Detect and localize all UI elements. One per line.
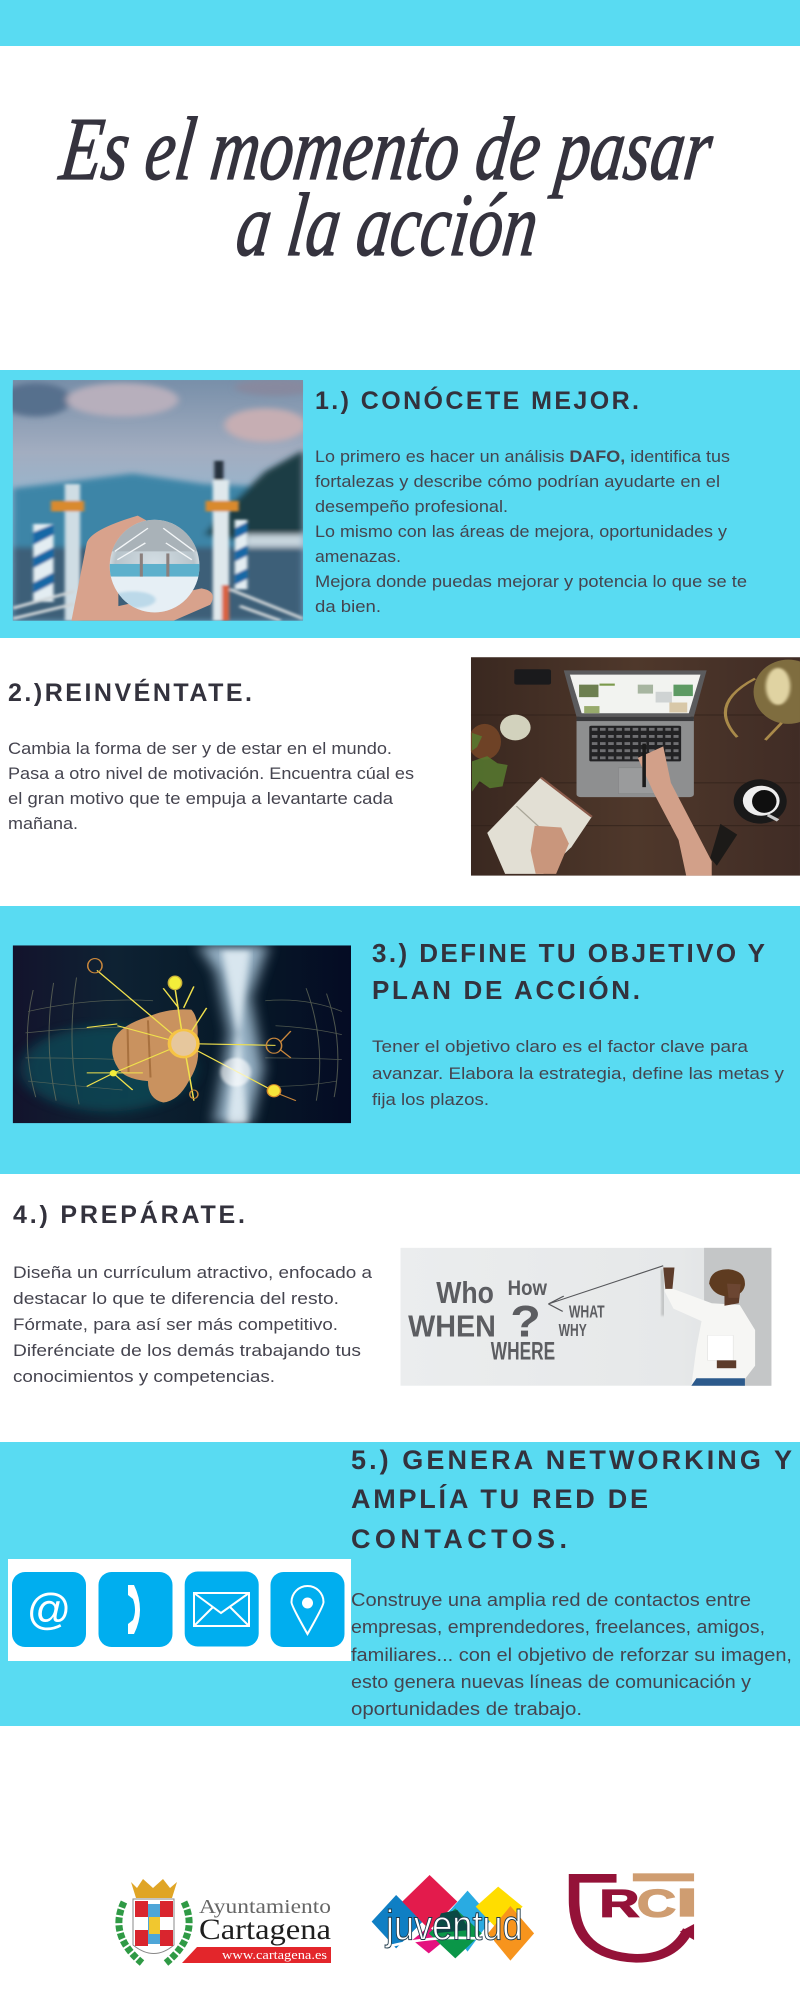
body text xyxy=(13,1263,373,1386)
logo: juventud: juventud xyxy=(384,1902,523,1948)
logo: RCT xyxy=(574,1873,694,1958)
arm with pen xyxy=(638,746,712,876)
heading: 5.) GENERA NETWORKING Y xyxy=(351,1445,792,1475)
body text: Lo mismo con las áreas de mejora, oportunidades y xyxy=(315,522,728,541)
body text: desempeño profesional. xyxy=(315,497,508,516)
panel: 1 conócete mejor xyxy=(0,370,800,638)
heading: AMPLÍA TU RED DE xyxy=(351,1483,648,1514)
plant xyxy=(468,724,501,760)
body text: conocimientos y competencias. xyxy=(13,1367,275,1386)
photo: woman writing questions on whiteboard: How xyxy=(508,1276,547,1300)
body text: amenazas. xyxy=(315,547,401,566)
body text: fija los plazos. xyxy=(372,1090,489,1109)
logo: Ayuntamiento de Cartagena xyxy=(119,1879,331,1963)
body text: fortalezas y describe cómo podrían ayudarte en el xyxy=(315,472,720,491)
body text xyxy=(372,1037,785,1109)
title xyxy=(54,99,718,275)
photo: woman writing questions on whiteboard: ? xyxy=(510,1296,541,1346)
crest xyxy=(119,1879,189,1963)
heading: PLAN DE ACCIÓN. xyxy=(372,975,640,1005)
body text: mañana. xyxy=(8,814,78,833)
icon: at sign xyxy=(12,1572,86,1647)
photo: finger pointing at network graphic xyxy=(13,945,351,1123)
body text: empresas, emprendedores, freelances, amigos, xyxy=(351,1616,765,1637)
lamp xyxy=(754,660,800,724)
body text xyxy=(8,739,414,833)
photo: woman writing questions on whiteboard: WHY xyxy=(559,1320,587,1340)
body text: Diseña un currículum atractivo, enfocado a xyxy=(13,1263,373,1282)
body text: familiares... con el objetivo de reforzar su imagen, xyxy=(351,1644,792,1665)
crystal ball xyxy=(110,520,199,612)
heading: 1.) CONÓCETE MEJOR. xyxy=(315,385,639,415)
hand xyxy=(71,516,213,621)
heading: 4.) PREPÁRATE. xyxy=(13,1200,245,1229)
body text xyxy=(315,447,747,616)
photo: woman writing questions on whiteboard: Who xyxy=(436,1276,494,1310)
body text: el gran motivo que te empuja a levantarte cada xyxy=(8,789,394,808)
body text: Lo primero es hacer un análisis DAFO, identifica tus xyxy=(315,447,730,466)
notebook xyxy=(487,777,592,874)
logo: Ayuntamiento de Cartagena: www.cartagena.es xyxy=(222,1947,327,1962)
body text: Tener el objetivo claro es el factor clave para xyxy=(372,1037,749,1056)
panel: 4 prepárate xyxy=(13,1200,771,1386)
body text: Fórmate, para así ser más competitivo. xyxy=(13,1315,338,1334)
contact icons strip xyxy=(8,1559,351,1661)
top band xyxy=(0,0,800,46)
icon: envelope xyxy=(185,1572,259,1646)
fist xyxy=(112,1009,198,1102)
panel: 3 define tu objetivo xyxy=(0,906,800,1174)
photo: hand holding crystal ball xyxy=(0,379,316,621)
body text: destacar lo que te diferencia del resto. xyxy=(13,1289,339,1308)
body text: Cambia la forma de ser y de estar en el mundo. xyxy=(8,739,392,758)
photo: woman writing questions on whiteboard: WHERE xyxy=(491,1337,555,1365)
laptop screen xyxy=(564,670,707,717)
icon: map pin xyxy=(270,1572,344,1647)
body text: Mejora donde puedas mejorar y potencia lo que se te xyxy=(315,572,747,591)
body text: Construye una amplia red de contactos entre xyxy=(351,1589,751,1610)
photo: woman writing questions on whiteboard: WHAT xyxy=(569,1301,605,1322)
logo: Ayuntamiento de Cartagena: Cartagena xyxy=(199,1913,331,1946)
photo: woman writing questions on whiteboard: WHEN xyxy=(408,1309,496,1343)
candle xyxy=(500,715,531,740)
logo: Ayuntamiento de Cartagena: Ayuntamiento xyxy=(199,1896,331,1918)
body text: Pasa a otro nivel de motivación. Encuentra cúal es xyxy=(8,764,414,783)
body text: esto genera nuevas líneas de comunicación y xyxy=(351,1671,752,1692)
heading: 2.)REINVÉNTATE. xyxy=(8,678,252,707)
body text xyxy=(351,1589,792,1719)
body text: avanzar. Elabora la estrategia, define las metas y xyxy=(372,1064,785,1083)
coffee mug xyxy=(734,779,787,824)
body text: Diferénciate de los demás trabajando tus xyxy=(13,1341,361,1360)
heading xyxy=(372,938,765,1005)
title: a la acción xyxy=(232,175,544,275)
hand on notebook xyxy=(531,826,569,874)
logo: juventud xyxy=(372,1875,534,1961)
icon: telephone xyxy=(98,1572,172,1647)
body text: oportunidades de trabajo. xyxy=(351,1698,582,1719)
laptop base xyxy=(577,717,694,797)
panel: 5 genera networking xyxy=(0,1442,800,1726)
glowing network xyxy=(87,970,276,1101)
body text: da bien. xyxy=(315,597,381,616)
heading xyxy=(351,1445,792,1554)
icon: at sign: @ xyxy=(27,1585,71,1634)
panel: 2 reinvéntate xyxy=(8,657,800,876)
photo: laptop on wooden desk xyxy=(468,657,800,876)
logo: RCT: R xyxy=(599,1882,639,1926)
photo: woman writing questions on whiteboard xyxy=(401,1248,771,1386)
logo: RCT: C xyxy=(637,1882,676,1926)
heading: 3.) DEFINE TU OBJETIVO Y xyxy=(372,938,765,968)
phone xyxy=(710,824,737,866)
heading: CONTACTOS. xyxy=(351,1524,567,1554)
woman xyxy=(661,1269,664,1316)
